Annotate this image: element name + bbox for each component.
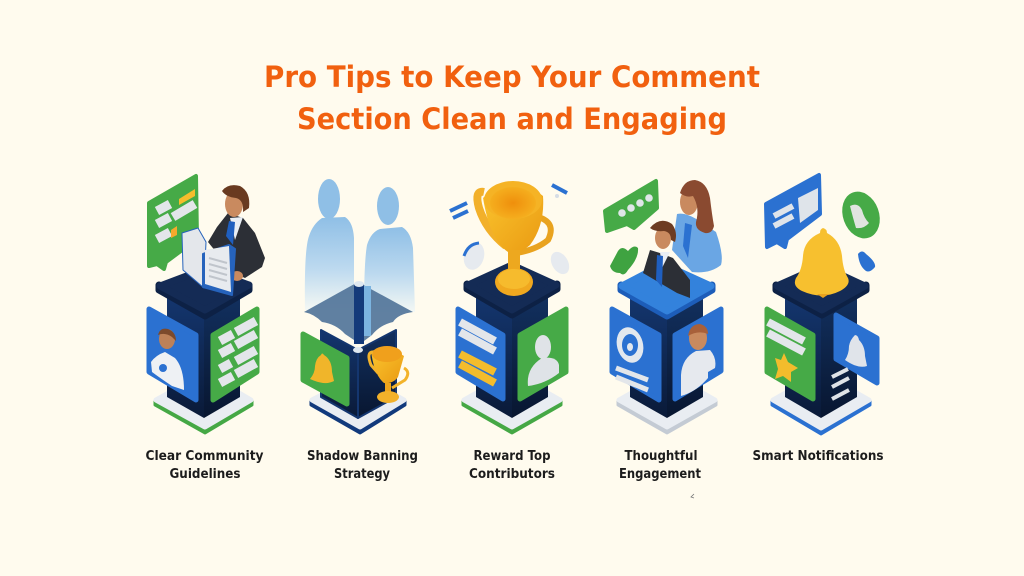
green chat bubble [605,181,657,231]
panel: blue bell card [836,315,877,383]
green circle bell badge [836,186,886,244]
column [476,296,548,418]
column [630,296,703,418]
top plate [159,269,249,316]
label: Clear Community Guidelines [146,449,264,482]
column walls [321,330,396,418]
centre post [353,281,371,353]
title: Pro Tips to Keep Your Comment [264,60,760,94]
top plate [621,266,712,316]
gold bell [795,228,849,298]
pillar 5: Smart Notifications [766,175,886,434]
green heart [610,247,638,274]
shadow figure left [305,179,354,310]
label: Thoughtful Engagement: Engagement [619,467,701,482]
title: Section Clean and Engaging [297,102,727,136]
man figure [643,221,690,298]
top plate [776,266,866,315]
label: Shadow Banning Strategy [307,449,418,482]
base [155,373,252,433]
label: Shadow Banning Strategy: Shadow Banning [307,449,418,464]
panel: green rules card [213,309,257,400]
column [167,296,240,418]
pillar 3: Reward Top Contributors [450,181,573,433]
floating confetti icons [450,185,573,277]
person with tie [208,185,265,281]
label: Reward Top Contributors [469,449,555,482]
label: Shadow Banning Strategy: Strategy [334,467,390,482]
label: Thoughtful Engagement: Thoughtful [624,449,698,464]
panel: green user card [520,309,566,399]
shadow figure right [364,187,415,312]
label: Smart Notifications: Smart Notifications [752,449,884,464]
menu lines on column [832,369,849,399]
panel: green bell card [303,334,347,404]
panel: blue person card [675,309,721,399]
blue speech bubble [766,175,820,247]
label: Reward Top Contributors: Reward Top [474,449,550,464]
open book [182,228,235,295]
translucent diamond roof [304,282,413,344]
small stray mark [691,494,694,498]
base [618,373,716,433]
woman figure [672,180,722,272]
base [311,375,405,433]
top plate [467,265,557,315]
pillar 2: Shadow Banning Strategy [303,179,415,433]
small trophy [369,346,408,403]
column [785,296,857,418]
panel: blue profile card [149,309,196,400]
label: Clear Community Guidelines: Clear Community [146,449,264,464]
panel: blue text card [458,309,503,399]
title [264,60,760,136]
pillar 1: Clear Community Guidelines [149,176,265,433]
gold trophy [477,181,551,296]
panel: green star card [767,309,813,399]
label: Clear Community Guidelines: Guidelines [170,467,241,482]
panel: blue webcam card [612,309,659,400]
small blue bell [858,252,875,272]
pillar 4: Thoughtful Engagement [605,180,722,433]
base [463,373,561,433]
label: Thoughtful Engagement [619,449,701,482]
base [772,373,870,434]
label: Reward Top Contributors: Contributors [469,467,555,482]
panel: green speech bubble [149,176,197,269]
